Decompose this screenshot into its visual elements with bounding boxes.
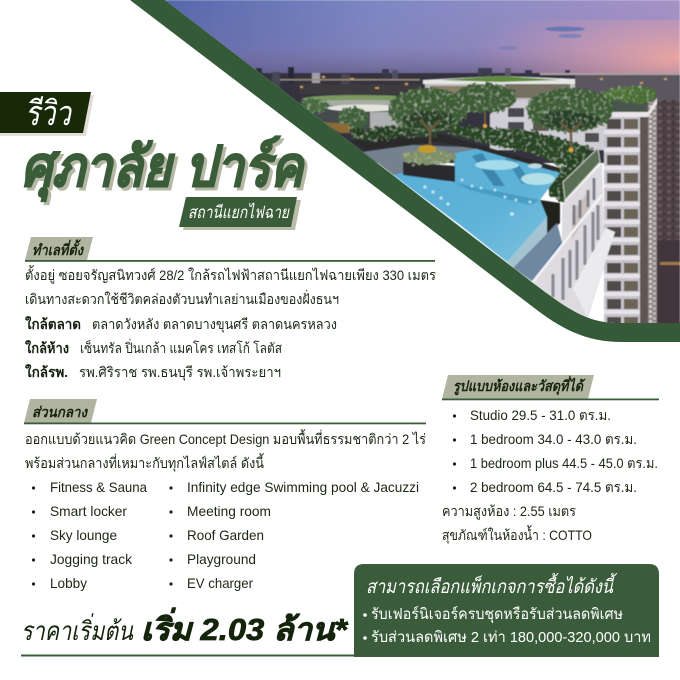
facilities list right: Playground bbox=[187, 551, 256, 567]
facilities intro: ออกแบบด้วยแนวคิด Green Concept Design มอบพื้นที่ธรรมชาติกว่า 2 ไร่ bbox=[25, 429, 426, 447]
room list bbox=[453, 407, 658, 495]
facilities list left: Fitness & Sauna bbox=[50, 479, 147, 495]
foreground wing of the building bbox=[532, 163, 615, 320]
facilities intro bbox=[25, 429, 426, 472]
location text bbox=[25, 265, 436, 381]
title with shadow: ศุภาลัย ปาร์ค bbox=[24, 138, 308, 205]
facilities list right bbox=[169, 479, 419, 591]
facilities heading tag: ส่วนกลาง bbox=[32, 405, 89, 421]
lit shrubs at left bbox=[322, 122, 350, 133]
location heading tag bbox=[25, 237, 93, 260]
dark wall behind pool bbox=[540, 200, 560, 235]
title with shadow: ศุภาลัย ปาร์ค bbox=[21, 135, 305, 202]
facilities intro: พร้อมส่วนกลางที่เหมาะกับทุกไลฟ์สไตล์ ดังนี้ bbox=[25, 453, 264, 472]
package items: รับส่วนลดพิเศษ 2 เท่า 180,000-320,000 บาท bbox=[371, 629, 651, 646]
deck bbox=[363, 145, 478, 176]
panel: purchase packages bbox=[354, 564, 659, 657]
facilities list right: Meeting room bbox=[187, 503, 271, 519]
ceiling height and sanitary ware bbox=[442, 503, 592, 544]
facilities list left bbox=[32, 479, 147, 591]
location text: รพ.ศิริราช รพ.ธนบุรี รพ.เจ้าพระยาฯ bbox=[79, 364, 281, 381]
price bbox=[21, 607, 361, 656]
price: เริ่ม 2.03 ล้าน* bbox=[141, 607, 349, 647]
infinity edge wall bbox=[507, 217, 547, 268]
location text: เซ็นทรัล ปิ่นเกล้า แมคโคร เทสโก้ โลตัส bbox=[80, 339, 282, 356]
pool bbox=[393, 149, 560, 262]
tree trunks bbox=[420, 112, 582, 150]
glass railing bbox=[563, 148, 600, 200]
green diagonal band bbox=[130, 0, 680, 342]
room list: 1 bedroom plus 44.5 - 45.0 ตร.ม. bbox=[470, 455, 658, 471]
room list: 1 bedroom 34.0 - 43.0 ตร.ม. bbox=[470, 431, 637, 447]
location text: เดินทางสะดวกใช้ชีวิตคล่องตัวบนทำเลย่านเมืองของฝั่งธนฯ bbox=[25, 290, 339, 307]
trees and hedge bbox=[301, 83, 656, 202]
warm lights bbox=[346, 124, 574, 152]
room list: Studio 29.5 - 31.0 ตร.ม. bbox=[470, 407, 611, 423]
wall beneath hedge bbox=[350, 133, 560, 175]
planter with flowers bbox=[402, 145, 456, 182]
location text: ตลาดวังหลัง ตลาดบางขุนศรี ตลาดนครหลวง bbox=[92, 316, 337, 333]
facilities list left: Lobby bbox=[50, 575, 87, 591]
panel: facilities bbox=[24, 399, 426, 591]
facilities list left: Sky lounge bbox=[50, 527, 117, 543]
city skyline bbox=[256, 66, 680, 164]
tag: review bbox=[0, 92, 94, 136]
panel: room types bbox=[442, 375, 659, 544]
package items: รับเฟอร์นิเจอร์ครบชุดหรือรับส่วนลดพิเศษ bbox=[371, 606, 623, 624]
location text: ตั้งอยู่ ซอยจรัญสนิทวงศ์ 28/2 ใกล้รถไฟฟ้าสถานีแยกไฟฉายเพียง 330 เมตร bbox=[25, 265, 436, 284]
location text: ใกล้ห้าง bbox=[25, 339, 69, 356]
facilities list left: Jogging track bbox=[50, 551, 133, 567]
distant city, right bbox=[655, 100, 680, 325]
package items bbox=[363, 606, 651, 646]
subtitle tag bbox=[179, 197, 301, 230]
location text: ใกล้ตลาด bbox=[25, 315, 81, 332]
ceiling height and sanitary ware: ความสูงห้อง : 2.55 เมตร bbox=[442, 503, 576, 520]
facilities heading tag bbox=[24, 399, 97, 423]
glass railing at pool edge bbox=[513, 223, 562, 282]
panel: location bbox=[25, 237, 436, 381]
subtitle label: สถานีแยกไฟฉาย bbox=[188, 202, 290, 222]
roof garden pavilion ring bbox=[300, 95, 420, 130]
location text: ใกล้รพ. bbox=[25, 363, 68, 380]
room types heading tag bbox=[442, 375, 594, 399]
room list: 2 bedroom 64.5 - 74.5 ตร.ม. bbox=[470, 479, 637, 495]
tag label: รีวิว bbox=[25, 95, 73, 133]
facilities list right: EV charger bbox=[187, 575, 253, 591]
photo: rooftop pool and city at dusk bbox=[130, 0, 680, 325]
main tower bbox=[600, 98, 657, 324]
facilities list left: Smart locker bbox=[50, 503, 127, 519]
price: ราคาเริ่มต้น bbox=[21, 613, 134, 646]
facilities list right: Infinity edge Swimming pool & Jacuzzi bbox=[187, 479, 419, 495]
location heading tag: ทำเลที่ตั้ง bbox=[32, 239, 85, 259]
upper building bbox=[423, 76, 605, 150]
room types heading tag: รูปแบบห้องและวัสดุที่ได้ bbox=[453, 375, 586, 396]
facilities list right: Roof Garden bbox=[187, 527, 264, 543]
ceiling height and sanitary ware: สุขภัณฑ์ในห้องน้ำ : COTTO bbox=[442, 525, 592, 544]
package heading: สามารถเลือกแพ็กเกจการซื้อได้ดังนี้ bbox=[366, 572, 618, 598]
sky bbox=[165, 0, 680, 74]
